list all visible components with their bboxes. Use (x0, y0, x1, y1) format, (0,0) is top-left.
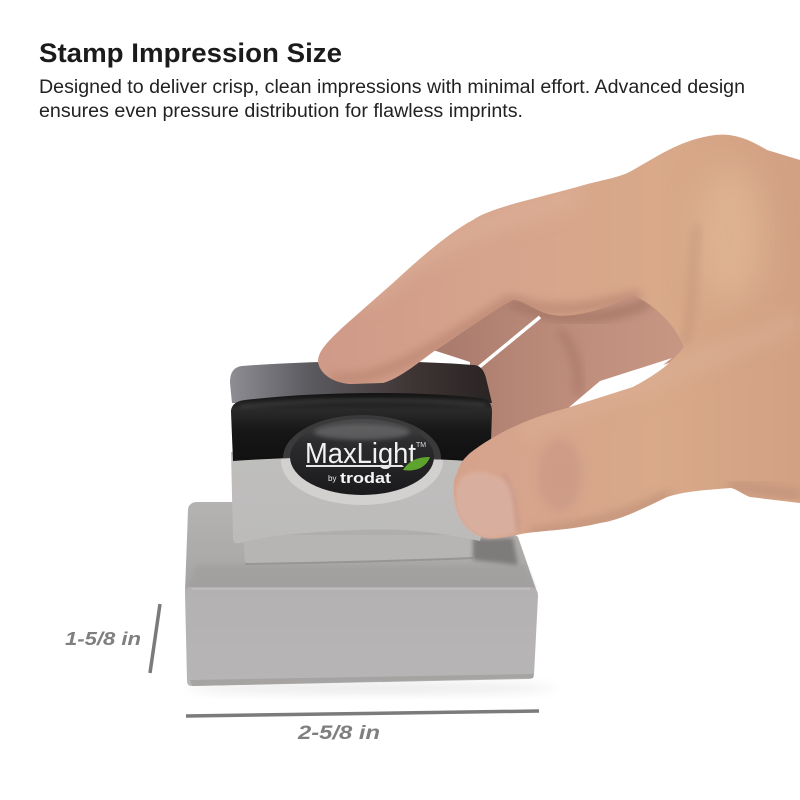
thumb joint (542, 443, 578, 506)
logo oval badge: trodat (340, 470, 391, 487)
gap between middle finger and thumb (567, 358, 672, 409)
description text (39, 77, 745, 122)
title: Stamp Impression Size (39, 38, 342, 68)
stem side shadow (473, 538, 518, 565)
height label: 1-5/8 in (65, 628, 141, 649)
floor shadow (185, 682, 555, 694)
logo oval badge: by (328, 474, 336, 483)
description text: ensures even pressure distribution for flawless imprints. (39, 101, 523, 122)
description text: Designed to deliver crisp, clean impressions with minimal effort. Advanced design (39, 77, 745, 98)
logo oval badge: TM (416, 442, 426, 449)
stamp handle gray body (231, 452, 485, 543)
hand with index finger and thumb (318, 135, 800, 539)
middle and ring fingers behind the stamp (433, 285, 695, 445)
stamp handle black band (231, 393, 492, 470)
stamp handle glass top (230, 361, 492, 403)
gap between fingers (478, 317, 540, 368)
height dimension line (150, 604, 160, 673)
band highlight (240, 400, 485, 407)
logo oval badge (290, 419, 434, 495)
stamp (185, 361, 538, 686)
width label: 2-5/8 in (297, 722, 380, 744)
logo oval badge: MaxLight (305, 438, 416, 470)
width dimension line (186, 711, 539, 716)
thumb top highlight (570, 368, 662, 407)
palm crease shadow (691, 230, 700, 284)
thumb nail (455, 472, 516, 538)
leaf (403, 457, 430, 470)
stem outline shadow (245, 558, 473, 564)
wrist shadow (730, 485, 800, 495)
logo ring (283, 415, 441, 460)
stamp base plate (185, 502, 538, 686)
index finger shading (330, 295, 640, 379)
knuckle highlight (702, 175, 762, 295)
logo halo (281, 417, 443, 505)
stamp stem (243, 535, 473, 564)
